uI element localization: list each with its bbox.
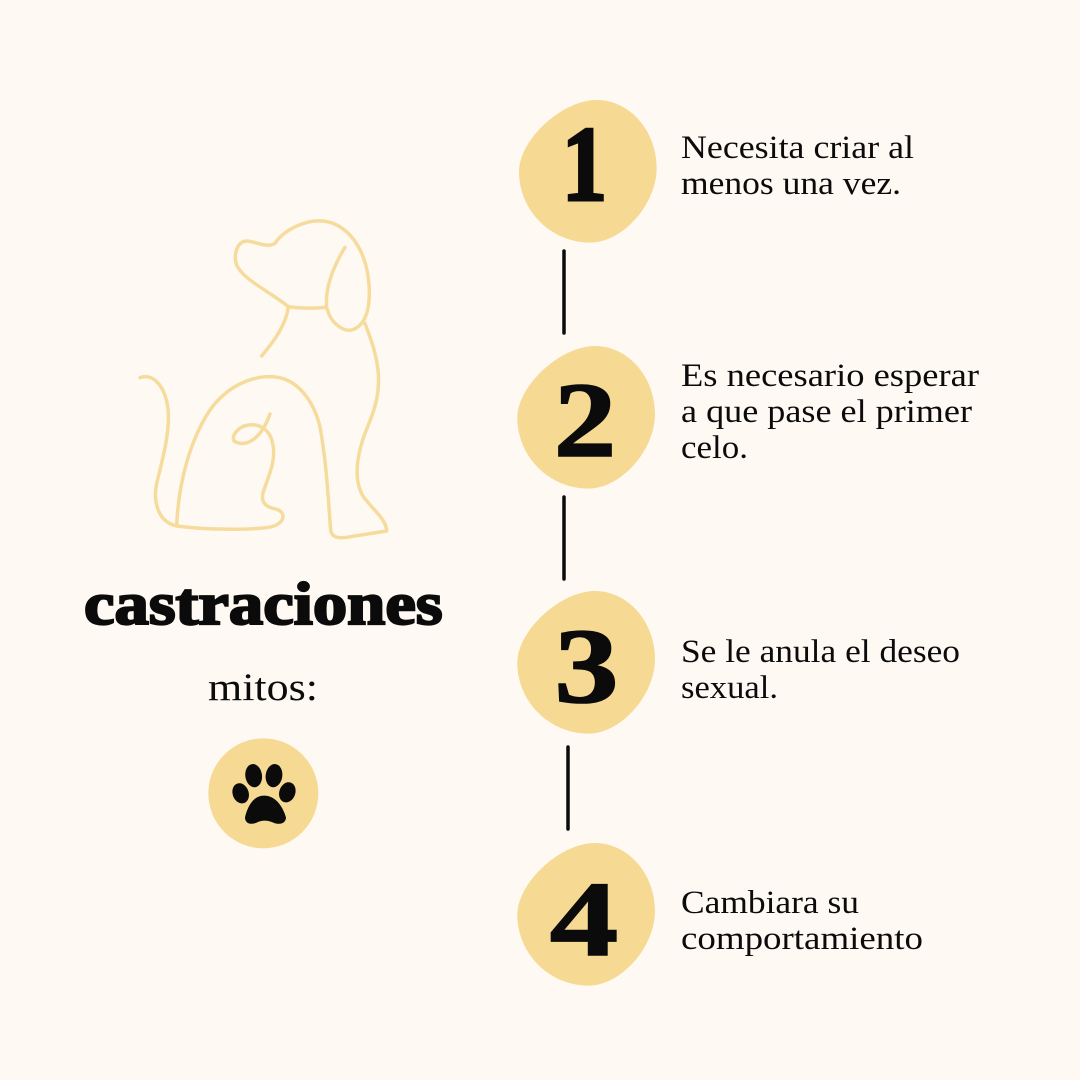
text: myth 2: celo. bbox=[681, 430, 748, 466]
step 1 bbox=[519, 100, 914, 243]
text: myth 4: Cambiara su bbox=[681, 885, 859, 921]
text: myth 2: Es necesario esperar bbox=[681, 358, 979, 394]
connector 2-3 bbox=[562, 497, 566, 579]
number blob 2 bbox=[517, 346, 655, 489]
number 2: 2 bbox=[554, 361, 616, 480]
text: myth 3 bbox=[681, 634, 960, 706]
number 3: 3 bbox=[554, 607, 619, 726]
connector 1-2 bbox=[562, 251, 566, 333]
text: myth 2: a que pase el primer bbox=[681, 394, 972, 430]
number blob 3 bbox=[517, 591, 655, 734]
number blob 1 bbox=[519, 100, 657, 243]
number 4: 4 bbox=[550, 859, 618, 979]
text: myth 1: menos una vez. bbox=[681, 166, 901, 202]
text: myth 3: sexual. bbox=[681, 670, 778, 706]
text: myth 1: Necesita criar al bbox=[681, 130, 914, 166]
connector 3-4 bbox=[566, 747, 570, 829]
title: castraciones bbox=[84, 571, 443, 637]
text: myth 4 bbox=[681, 885, 923, 957]
number 1: 1 bbox=[562, 106, 607, 224]
subtitle: mitos: bbox=[208, 666, 318, 709]
text: myth 4: comportamiento bbox=[681, 921, 923, 957]
text: myth 2 bbox=[681, 358, 979, 466]
step 3 bbox=[517, 591, 960, 734]
step 2 bbox=[517, 346, 979, 489]
text: myth 3: Se le anula el deseo bbox=[681, 634, 960, 670]
icon: paw badge bbox=[208, 738, 318, 848]
icon: line-art dog bbox=[140, 221, 387, 538]
number blob 4 bbox=[517, 843, 655, 986]
step 4 bbox=[517, 843, 923, 986]
text: myth 1 bbox=[681, 130, 914, 202]
